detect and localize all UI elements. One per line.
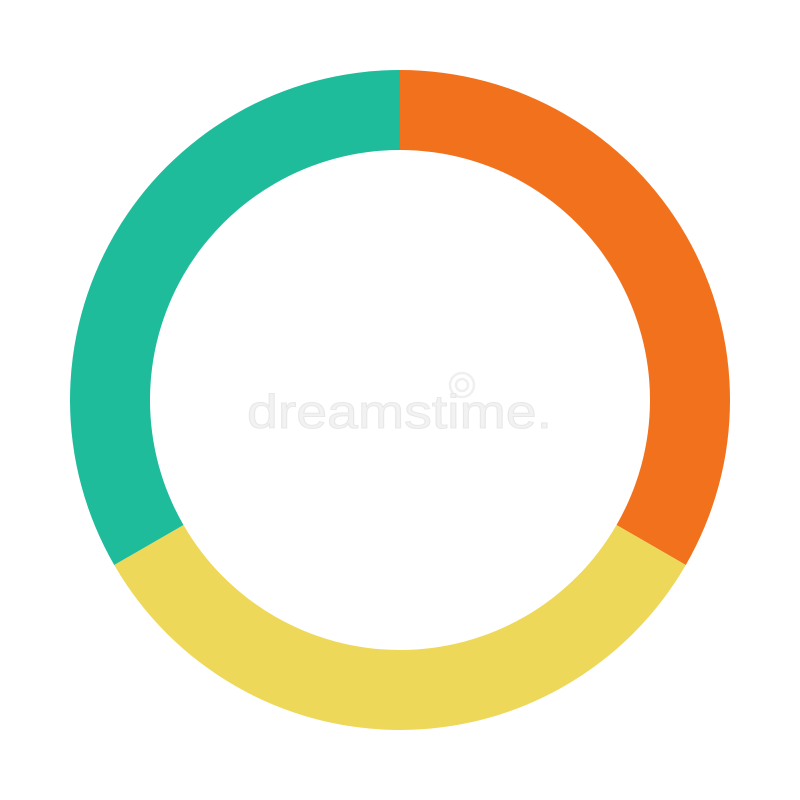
watermark text: dreamstime. (247, 385, 552, 438)
segment: teal (70, 70, 400, 565)
segment: orange (400, 70, 730, 565)
watermark (247, 373, 552, 438)
watermark logo (450, 373, 474, 397)
segment: yellow (114, 525, 686, 730)
